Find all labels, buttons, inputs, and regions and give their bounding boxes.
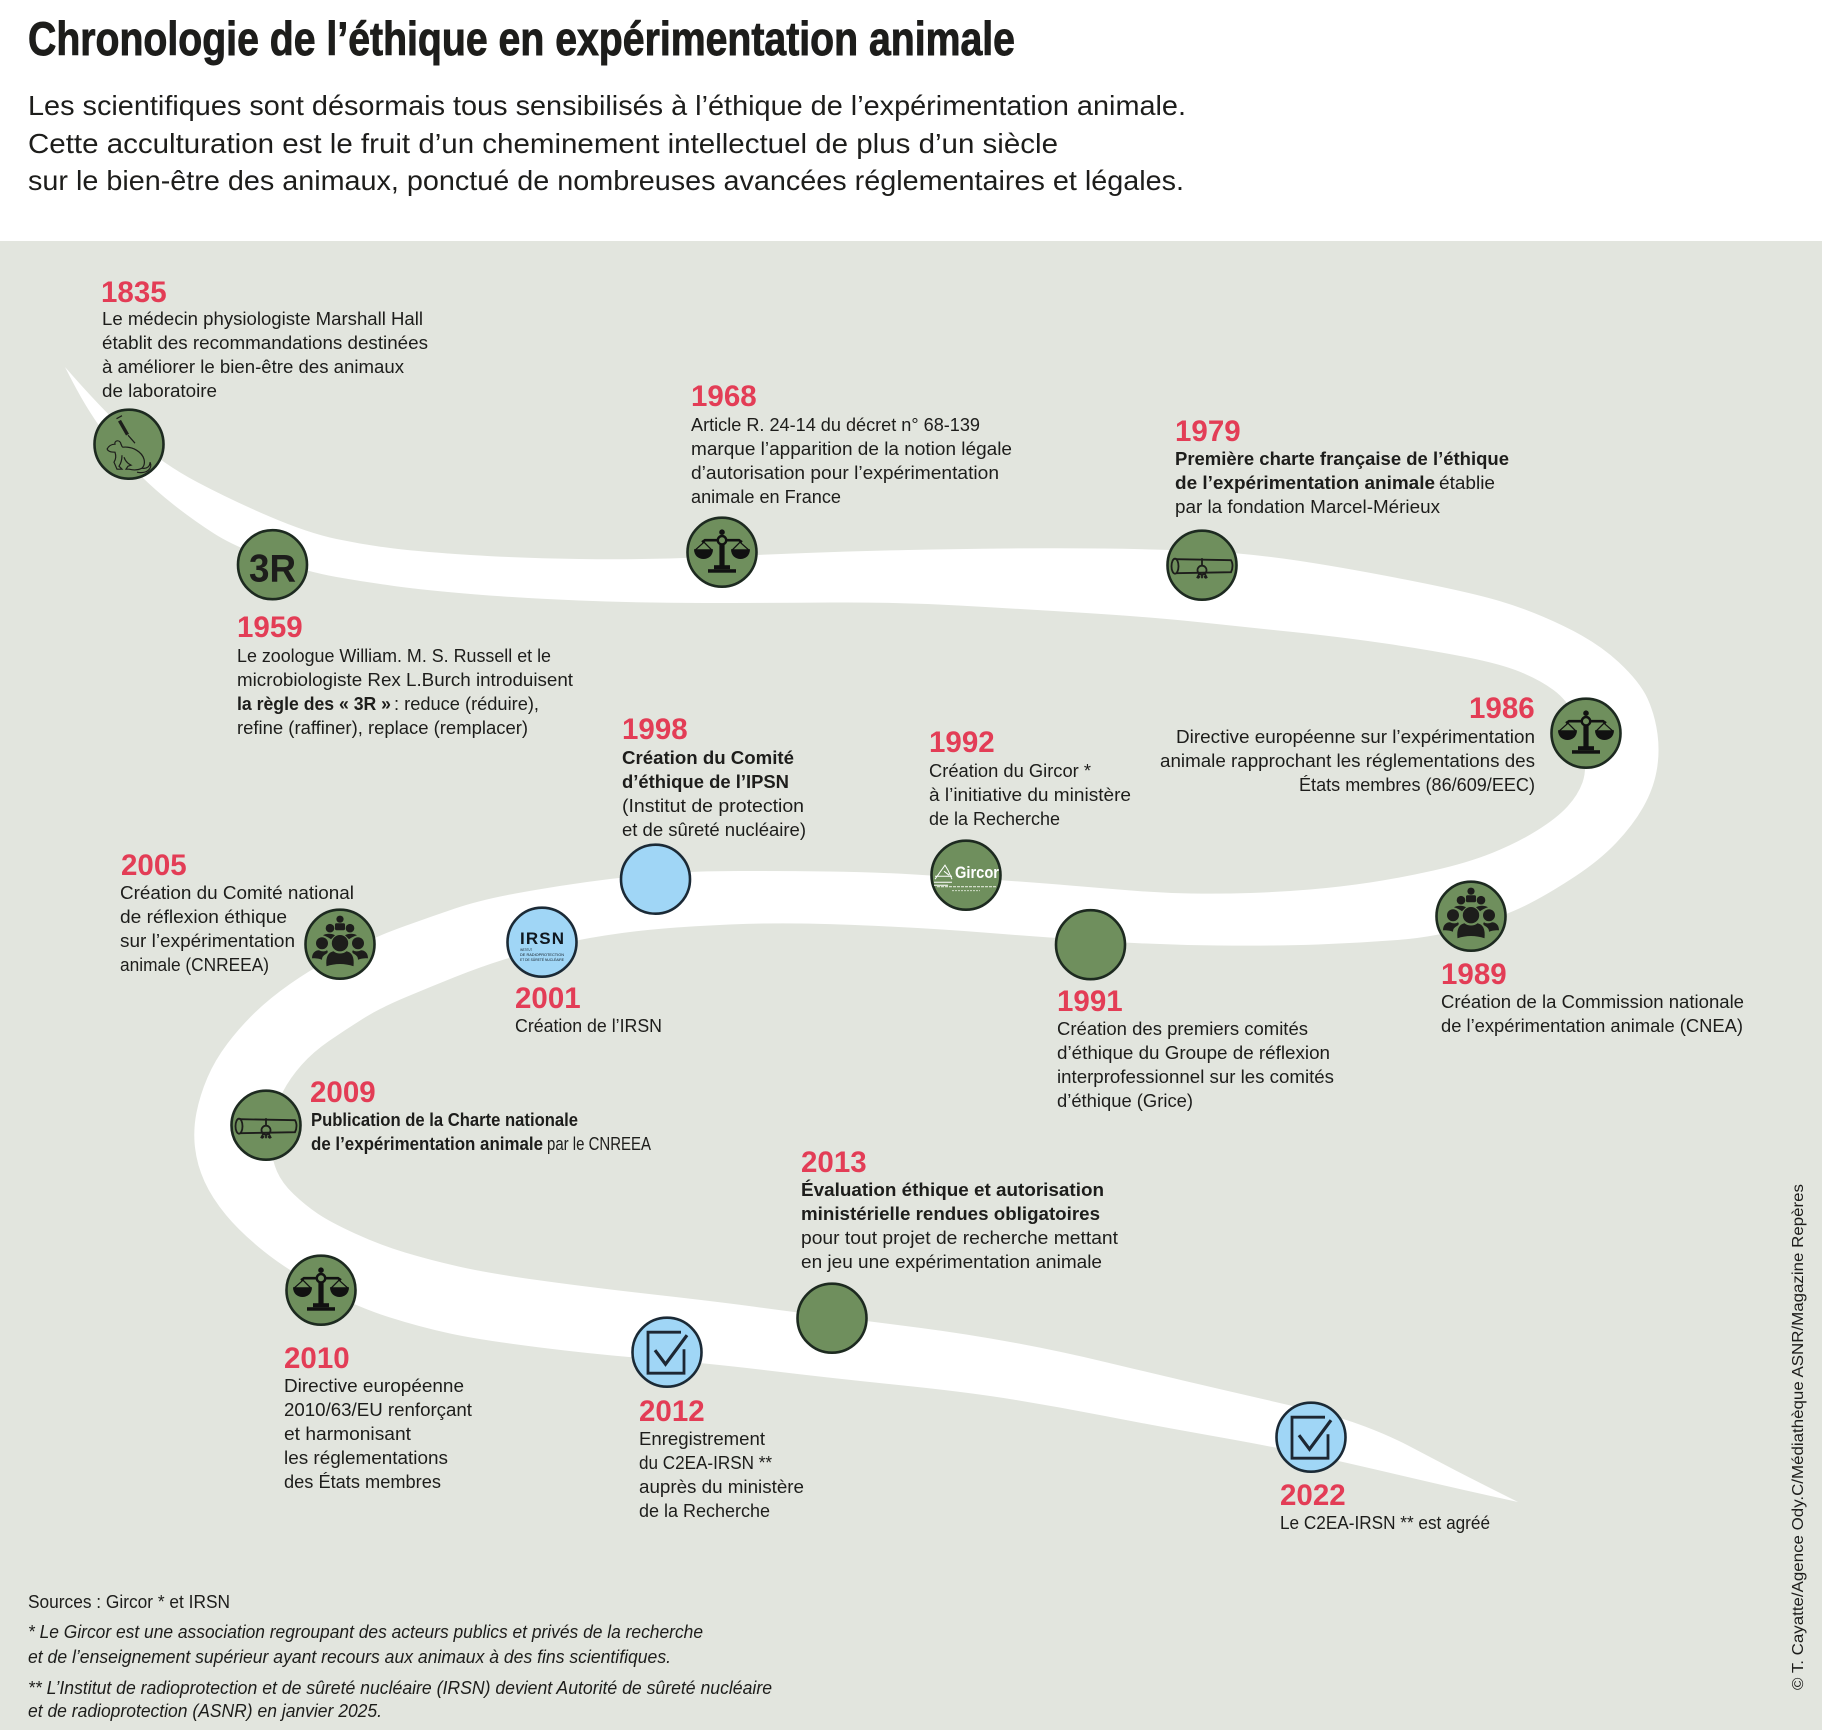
text 1991: interprofessionnel sur les comités	[1057, 1067, 1334, 1087]
year 2012: 2012	[639, 1395, 705, 1428]
year 2013: 2013	[801, 1146, 867, 1179]
icon: 3R	[238, 530, 307, 599]
text 2009: Publication de la Charte nationale	[311, 1110, 578, 1130]
icon: 3R: 3R	[249, 548, 296, 591]
text 2022: Le C2EA-IRSN ** est agréé	[1280, 1513, 1490, 1533]
icon: people	[306, 910, 374, 979]
text 2013: pour tout projet de recherche mettant	[801, 1228, 1118, 1248]
text 1959: microbiologiste Rex L.Burch introduisent	[237, 670, 573, 690]
text 1991: d’éthique du Groupe de réflexion	[1057, 1043, 1330, 1063]
text 1998: (Institut de protection	[622, 796, 804, 816]
event 1979	[1168, 415, 1509, 600]
icon: plain green disc	[798, 1284, 866, 1353]
text 1979: établie	[1439, 473, 1495, 493]
text 1835: à améliorer le bien-être des animaux	[102, 357, 404, 377]
year 1991: 1991	[1057, 985, 1123, 1018]
text 1992	[929, 761, 1131, 829]
sources and footnotes	[28, 1592, 772, 1721]
icon: IRSN logo: INSTITUT	[520, 948, 533, 952]
text 1968: marque l’apparition de la notion légale	[691, 439, 1012, 459]
text 2012: Enregistrement	[639, 1429, 765, 1449]
text 1979: de l’expérimentation animale	[1175, 473, 1435, 493]
event 2001	[508, 908, 662, 1036]
intro text	[28, 90, 1186, 196]
text 2005: animale (CNREEA)	[120, 955, 269, 975]
text 2010: des États membres	[284, 1472, 441, 1492]
text 1959	[237, 646, 573, 738]
text 2010: et harmonisant	[284, 1424, 411, 1444]
text 1835: de laboratoire	[102, 381, 217, 401]
text 1991: d’éthique (Grice)	[1057, 1091, 1193, 1111]
event 1986	[1160, 692, 1620, 795]
event 2013	[798, 1146, 1118, 1353]
text 2005: de réflexion éthique	[120, 907, 287, 927]
text 1979: Première charte française de l’éthique	[1175, 449, 1509, 469]
year 1979: 1979	[1175, 415, 1241, 448]
credit: © T. Cayatte/Agence Ody.C/Médiathèque ASNR/Magazine Repères	[1790, 1184, 1807, 1690]
event 1968	[688, 380, 1012, 587]
sources and footnotes: * Le Gircor est une association regroupant des acteurs publics et privés de la recherche	[28, 1622, 703, 1642]
text 2010: Directive européenne	[284, 1376, 464, 1396]
text 2013	[801, 1179, 1118, 1272]
icon: mouse and syringe	[94, 410, 164, 479]
text 2005: sur l’expérimentation	[120, 931, 295, 951]
text 1986: États membres (86/609/EEC)	[1299, 775, 1535, 795]
year 2010: 2010	[284, 1342, 350, 1375]
text 1991	[1057, 1019, 1334, 1111]
icon: scales	[688, 518, 756, 587]
title: Chronologie de l’éthique en expérimentation animale	[28, 12, 1015, 65]
text 1968	[691, 415, 1012, 507]
timeline events	[94, 276, 1744, 1533]
intro text: Les scientifiques sont désormais tous sensibilisés à l’éthique de l’expérimentation animale.	[28, 90, 1186, 121]
text 2012: du C2EA-IRSN **	[639, 1453, 772, 1473]
event 2022	[1276, 1403, 1490, 1533]
year 1992: 1992	[929, 726, 995, 759]
event 1992	[929, 726, 1131, 910]
text 2012: de la Recherche	[639, 1501, 770, 1521]
icon: plain green disc	[1056, 910, 1125, 979]
text 1835: établit des recommandations destinées	[102, 333, 428, 353]
text 2009: par le CNREEA	[547, 1134, 651, 1154]
sources and footnotes: et de radioprotection (ASNR) en janvier 2025.	[28, 1701, 382, 1721]
text 1998: Création du Comité	[622, 748, 794, 768]
icon: scales	[286, 1256, 356, 1325]
event 2012	[632, 1318, 804, 1521]
icon: checkbox	[1276, 1403, 1346, 1472]
year 2022: 2022	[1280, 1479, 1346, 1512]
event 2009	[232, 1076, 651, 1160]
event 1989	[1436, 882, 1744, 1036]
icon: IRSN logo: ET DE SÛRETÉ NUCLÉAIRE	[520, 957, 565, 962]
text 1998: et de sûreté nucléaire)	[622, 820, 806, 840]
text 2013: en jeu une expérimentation animale	[801, 1252, 1102, 1272]
text 1989: Création de la Commission nationale	[1441, 992, 1744, 1012]
text 1968: Article R. 24-14 du décret n° 68-139	[691, 415, 980, 435]
event 2005	[120, 849, 374, 979]
text 1991: Création des premiers comités	[1057, 1019, 1308, 1039]
text 1959: refine (raffiner), replace (remplacer)	[237, 718, 528, 738]
text 1992: à l’initiative du ministère	[929, 785, 1131, 805]
year 1998: 1998	[622, 713, 688, 746]
icon: people	[1436, 882, 1506, 951]
year 2005: 2005	[121, 849, 187, 882]
text 1959: : reduce (réduire),	[394, 694, 539, 714]
text 2010: les réglementations	[284, 1448, 448, 1468]
icon: IRSN logo	[508, 908, 576, 977]
text 1998	[622, 748, 806, 840]
text 1959: la règle des « 3R »	[237, 694, 391, 714]
event 1998	[621, 713, 806, 914]
text 1979: par la fondation Marcel-Mérieux	[1175, 497, 1440, 517]
text 1835: Le médecin physiologiste Marshall Hall	[102, 309, 423, 329]
text 2005	[120, 883, 354, 975]
year 1968: 1968	[691, 380, 757, 413]
icon: Gircor logo	[932, 841, 1000, 910]
text 1989: de l’expérimentation animale (CNEA)	[1441, 1016, 1743, 1036]
icon: scroll	[232, 1091, 300, 1160]
text 1998: d’éthique de l’IPSN	[622, 772, 789, 792]
year 1989: 1989	[1441, 958, 1507, 991]
icon: scales	[1552, 699, 1620, 768]
text 2010: 2010/63/EU renforçant	[284, 1400, 472, 1420]
year 1959: 1959	[237, 611, 303, 644]
text 2012: auprès du ministère	[639, 1477, 804, 1497]
text 1968: animale en France	[691, 487, 841, 507]
text 2009: de l’expérimentation animale	[311, 1134, 543, 1154]
text 1992: Création du Gircor *	[929, 761, 1091, 781]
year 1835: 1835	[101, 276, 167, 309]
sources and footnotes: et de l’enseignement supérieur ayant recours aux animaux à des fins scientifiques.	[28, 1647, 671, 1667]
winding ribbon path	[65, 367, 1659, 1502]
text 1959: Le zoologue William. M. S. Russell et le	[237, 646, 551, 666]
icon: IRSN logo: DE RADIOPROTECTION	[520, 953, 565, 957]
icon: scroll	[1168, 531, 1236, 600]
sources and footnotes: Sources : Gircor * et IRSN	[28, 1592, 230, 1612]
intro text: sur le bien-être des animaux, ponctué de nombreuses avancées réglementaires et légales.	[28, 165, 1184, 196]
text 2013: Évaluation éthique et autorisation	[801, 1179, 1104, 1200]
text 1986: Directive européenne sur l’expérimentation	[1176, 727, 1535, 747]
text 2012	[639, 1429, 804, 1521]
text 1968: d’autorisation pour l’expérimentation	[691, 463, 999, 483]
year 1986: 1986	[1469, 692, 1535, 725]
text 1989	[1441, 992, 1744, 1036]
text 2010	[284, 1376, 472, 1492]
year 2001: 2001	[515, 982, 581, 1015]
year 2009: 2009	[310, 1076, 376, 1109]
text 2005: Création du Comité national	[120, 883, 354, 903]
text 2001: Création de l’IRSN	[515, 1016, 662, 1036]
sources and footnotes: ** L’Institut de radioprotection et de sûreté nucléaire (IRSN) devient Autorité de sûreté nucléaire	[28, 1678, 772, 1698]
event 1959	[237, 530, 573, 738]
text 1979	[1175, 449, 1509, 517]
event 1835	[94, 276, 428, 479]
text 1992: de la Recherche	[929, 809, 1060, 829]
event 1991	[1056, 910, 1334, 1111]
text 1986: animale rapprochant les réglementations des	[1160, 751, 1535, 771]
icon: Gircor logo: Gircor	[955, 863, 999, 882]
event 2010	[284, 1256, 472, 1492]
icon: IRSN logo: IRSN	[520, 929, 564, 948]
text 2009	[311, 1110, 651, 1154]
text 1986	[1160, 727, 1535, 795]
icon: checkbox	[632, 1318, 702, 1387]
text 1835	[102, 309, 428, 401]
text 2013: ministérielle rendues obligatoires	[801, 1204, 1100, 1224]
icon: plain blue disc	[621, 845, 690, 914]
intro text: Cette acculturation est le fruit d’un cheminement intellectuel de plus d’un siècle	[28, 128, 1058, 159]
